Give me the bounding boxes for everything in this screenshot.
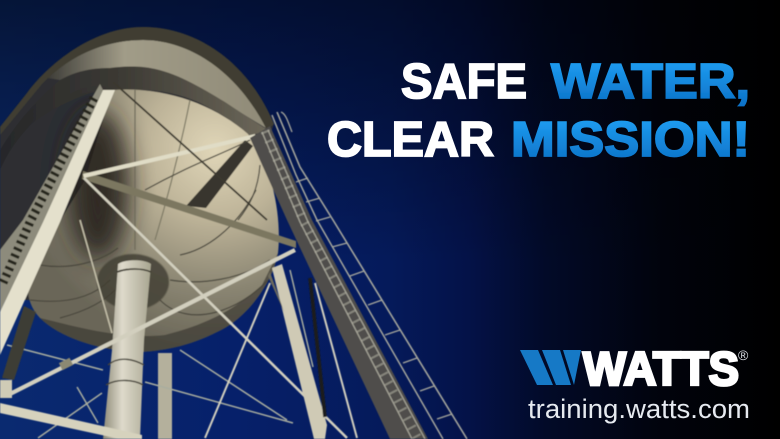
headline line 1	[401, 55, 750, 109]
dark right rod	[310, 278, 325, 417]
ladder	[272, 112, 467, 439]
Watts logo	[520, 342, 749, 395]
thin background rods	[7, 220, 313, 438]
back column	[158, 353, 172, 439]
tank roof rim	[0, 27, 274, 135]
tank lower bowl	[28, 89, 279, 352]
headline line 2	[327, 113, 750, 167]
water tower photo	[0, 27, 467, 439]
rod clamp	[59, 358, 73, 370]
bowl left dark shade	[66, 110, 130, 260]
headline line 2: MISSION!	[511, 113, 750, 167]
dark diagonal rods	[113, 82, 267, 220]
bowl lower shade	[40, 253, 278, 352]
bowl shadow stripe	[186, 140, 253, 208]
right leg	[272, 264, 327, 439]
tank dark band	[0, 66, 268, 170]
headline line 1: WATER,	[551, 55, 750, 109]
headline line 1: SAFE	[401, 55, 527, 109]
left truss main band	[0, 90, 115, 355]
tank silhouette	[0, 27, 274, 300]
bowl ribs	[30, 90, 270, 318]
headline line 2: CLEAR	[327, 113, 494, 167]
light diagonal rods	[10, 178, 357, 438]
website url: training.watts.com	[528, 394, 750, 424]
logo stripes	[520, 350, 581, 385]
base clamp	[0, 380, 12, 398]
bowl collar	[97, 254, 169, 310]
central column	[103, 260, 151, 439]
tower lattice	[262, 130, 425, 439]
headline	[327, 55, 750, 167]
lower left leg	[2, 306, 36, 380]
registered mark: ®	[738, 347, 749, 363]
main horizontal beam	[82, 171, 296, 248]
tank upper cylinder	[48, 40, 266, 128]
left truss lattice	[0, 84, 103, 312]
main diagonal tower leg	[250, 126, 428, 439]
base beam	[0, 403, 142, 439]
upper light strut	[83, 134, 256, 178]
logo wordmark: WATTS	[583, 342, 739, 395]
